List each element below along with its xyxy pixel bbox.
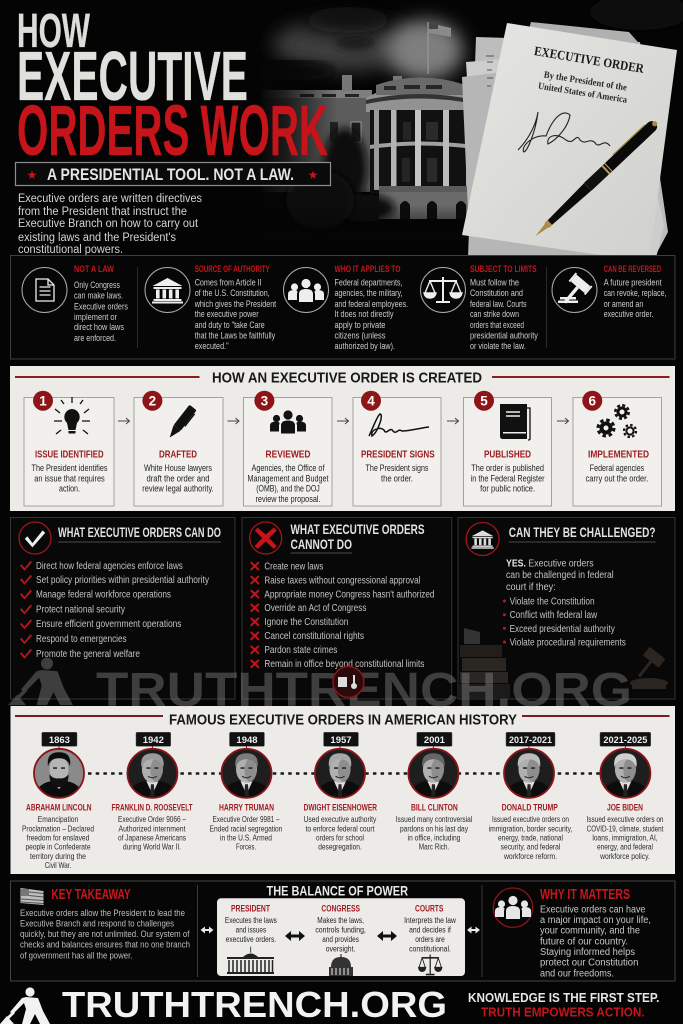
step 2 — [134, 391, 223, 506]
balance of power: THE BALANCE OF POWER — [266, 882, 408, 898]
portrait — [33, 749, 85, 799]
fact: subject to limits: presidential authority — [470, 330, 538, 340]
entry: Trump — [489, 732, 572, 861]
entry: Lincoln: people in Confederate — [26, 843, 91, 852]
subtitle banner: ★ — [308, 168, 318, 182]
step 3: Agencies, the Office of — [252, 463, 325, 473]
list of powers: Manage federal workforce operations — [36, 590, 171, 600]
list of powers: Set policy priorities within presidential authority — [36, 575, 209, 586]
balance of power — [200, 882, 480, 976]
icon: flag — [20, 888, 44, 905]
fact: subject to limits: can strike down — [470, 309, 519, 319]
branch: congress: oversight. — [326, 945, 355, 954]
fact: source of authority: that the Laws be faithfully — [195, 330, 276, 340]
icon: x in circle — [250, 522, 282, 554]
list of limits: Appropriate money Congress hasn't authorized — [264, 590, 434, 600]
entry: Lincoln — [22, 732, 94, 870]
list of grounds: Conflict with federal law — [510, 610, 598, 621]
fact: source of authority: SOURCE OF AUTHORITY — [195, 264, 270, 275]
key takeaway: Executive Branch and respond to challenges — [20, 919, 174, 930]
footer tagline — [468, 991, 659, 1020]
entry: Clinton — [396, 732, 472, 852]
fact: source of authority — [145, 264, 277, 351]
entry: Truman — [210, 732, 282, 852]
why it matters: WHY IT MATTERS — [540, 887, 630, 903]
icon: White House building — [262, 75, 475, 219]
title: EXECUTIVE — [17, 37, 248, 115]
icon: white house — [227, 947, 274, 974]
list of powers: Promote the general welfare — [36, 649, 140, 660]
entry: Lincoln: ABRAHAM LINCOLN — [26, 802, 92, 812]
icon: people — [270, 410, 306, 434]
intro text: constitutional powers. — [18, 244, 123, 256]
branch: courts: Interprets the law — [404, 916, 456, 925]
entry: Trump: 2017-2021 — [509, 735, 553, 746]
step 3: REVIEWED — [266, 448, 311, 460]
arrow — [467, 926, 480, 934]
entry: Trump: Issued executive orders on — [492, 815, 569, 824]
fact: source of authority: of the U.S. Constitution, — [195, 288, 270, 298]
watermark: TRUTHTRENCH.ORG — [96, 664, 632, 717]
list of grounds: Violate the Constitution — [510, 596, 595, 608]
list of grounds: Exceed presidential authority — [510, 624, 615, 635]
answer text: court if they: — [506, 582, 556, 593]
entry: Eisenhower: to enforce federal court — [306, 824, 375, 833]
branch: courts: constitutional. — [409, 945, 451, 954]
arrow — [377, 931, 397, 941]
step 4 — [353, 391, 441, 506]
step 5 — [464, 391, 552, 506]
heading: CANNOT DO — [290, 536, 352, 552]
portrait — [314, 747, 366, 799]
panel: what executive orders can do — [10, 518, 235, 699]
entry: Roosevelt: of Japanese Americans — [118, 834, 186, 843]
portrait — [407, 747, 459, 799]
icon: book — [500, 404, 530, 440]
footer logo: TRUTHTRENCH.ORG — [62, 984, 447, 1024]
list of powers: Direct how federal agencies enforce laws — [36, 561, 183, 572]
entry: Clinton: 2001 — [424, 735, 446, 746]
fact: can be reversed — [552, 264, 666, 319]
step 6 — [573, 391, 662, 506]
branch: congress: CONGRESS — [321, 904, 360, 914]
icon: scales — [418, 955, 442, 975]
icon: stormy sky — [258, 7, 463, 81]
entry: Biden — [586, 732, 664, 861]
entry: Roosevelt: Executive Order 9066 – — [118, 815, 186, 824]
fact: source of authority: which gives the President — [194, 299, 277, 309]
fact: not a law: implement or — [74, 312, 117, 322]
arrow — [200, 926, 214, 934]
list of grounds: Violate procedural requirements — [510, 638, 626, 648]
entry: Biden: COVID-19, climate, student — [587, 824, 664, 833]
step 2: draft the order and — [146, 473, 210, 483]
step 4: 4 — [367, 394, 375, 408]
why it matters: protect our Constitution — [540, 958, 638, 969]
branch: president — [225, 904, 277, 974]
executive order document with pen: United States of America — [537, 82, 628, 106]
entry: Biden: JOE BIDEN — [607, 802, 643, 812]
step 6: 6 — [589, 394, 597, 408]
why it matters — [493, 887, 651, 979]
panel: bottom summary — [10, 881, 675, 981]
entry: Eisenhower: desegregation. — [318, 843, 362, 852]
step 3: 3 — [261, 394, 269, 408]
footer tagline: KNOWLEDGE IS THE FIRST STEP. — [468, 991, 659, 1005]
step 4: The President signs — [366, 463, 429, 473]
portrait — [503, 747, 555, 799]
heading: FAMOUS EXECUTIVE ORDERS IN AMERICAN HISTORY — [169, 712, 517, 728]
step 4: the order. — [381, 473, 413, 483]
intro text: Executive Branch on how to carry out — [18, 218, 199, 230]
panel: famous executive orders — [10, 706, 675, 874]
branch: courts — [404, 904, 456, 975]
fact: can be reversed: executive order. — [604, 309, 653, 319]
fact: source of authority: the executive power — [195, 309, 259, 319]
branch: congress — [315, 904, 366, 976]
entry: Biden: loans, immigration, AI, — [592, 834, 658, 843]
list of powers — [20, 561, 209, 660]
key takeaway — [20, 887, 190, 961]
why it matters: Staying informed helps — [540, 947, 635, 958]
icon: capitol — [329, 954, 353, 976]
entry: Truman: Forces. — [236, 843, 256, 852]
watermark — [8, 658, 632, 717]
entry: Biden: 2021-2025 — [603, 735, 648, 746]
entry: Eisenhower — [304, 732, 377, 852]
step 1: The President identifies — [32, 463, 108, 473]
fade of building into background — [258, 60, 338, 210]
branch: courts: and decides if — [409, 925, 452, 934]
branch: congress: Makes the laws, — [317, 916, 364, 925]
arrow — [228, 418, 239, 424]
intro text: Executive orders are written directives — [18, 193, 202, 205]
step 1: action. — [59, 484, 80, 494]
fact: can be reversed: A future president — [604, 278, 662, 288]
fact: who it applies to: It does not directly — [334, 309, 394, 319]
title: ORDERS WORK — [17, 92, 328, 171]
step 1: ISSUE IDENTIFIED — [35, 448, 104, 460]
entry: Truman: Executive Order 9981 – — [212, 815, 280, 824]
step 2: White House lawyers — [144, 463, 212, 473]
entry: Trump: DONALD TRUMP — [502, 802, 558, 812]
step 1 — [24, 391, 114, 506]
step 6: IMPLEMENTED — [588, 448, 649, 460]
fact: subject to limits: SUBJECT TO LIMITS — [470, 264, 537, 275]
answer text: can be challenged in federal — [506, 570, 614, 581]
portrait — [599, 747, 651, 799]
list of limits: Override an Act of Congress — [264, 603, 366, 614]
icon: light bulb — [54, 397, 90, 434]
icon: fountain pen — [531, 117, 660, 240]
entry: Trump: immigration, border security, — [489, 824, 572, 833]
step 2: review legal authority. — [142, 484, 214, 494]
list of limits — [250, 562, 434, 670]
panel: how an executive order is created — [10, 366, 675, 511]
fact: not a law: Executive orders — [74, 302, 128, 312]
panel: key facts — [10, 256, 675, 359]
fact: who it applies to: agencies, the military, — [334, 288, 402, 298]
step 4: PRESIDENT SIGNS — [361, 448, 435, 460]
entry: Lincoln: freedom for enslaved — [27, 834, 89, 843]
arrow — [285, 931, 305, 941]
entry: Lincoln: territory during the — [30, 852, 86, 861]
branch: congress: and provides — [322, 935, 359, 944]
heading: HOW AN EXECUTIVE ORDER IS CREATED — [212, 370, 482, 386]
list of powers: Respond to emergencies — [36, 634, 127, 645]
entry: Truman: in the U.S. Armed — [220, 834, 272, 843]
list of limits: Pardon state crimes — [264, 645, 337, 656]
icon: books — [458, 628, 510, 698]
entry: Lincoln: 1863 — [49, 735, 70, 746]
entry: Trump: security, and federal — [501, 843, 561, 852]
subtitle banner: ★ — [27, 168, 37, 182]
branch: president: Executes the laws — [225, 916, 277, 925]
icon: signature — [518, 112, 610, 152]
answer text — [506, 558, 614, 593]
why it matters: and our freedoms. — [540, 968, 614, 979]
branch: courts: orders are — [415, 935, 445, 944]
entry: Truman: HARRY TRUMAN — [219, 802, 274, 812]
fact: subject to limits: or violate the law. — [470, 341, 526, 351]
fact: subject to limits: orders that exceed — [470, 320, 524, 330]
step 6: Federal agencies — [590, 463, 645, 473]
portrait — [126, 747, 178, 799]
fact: who it applies to: citizens (unless — [334, 330, 386, 340]
entry: Clinton: Marc Rich. — [419, 843, 449, 852]
entry: Clinton: pardons on his last day — [400, 824, 468, 833]
hero image: White House at dusk — [258, 0, 683, 245]
fact: who it applies to — [284, 264, 408, 351]
entry: Lincoln: Emancipation — [38, 815, 78, 824]
step 2: 2 — [149, 394, 156, 408]
fact: not a law: can make laws. — [74, 290, 123, 300]
arrow — [447, 418, 458, 424]
entry: Lincoln: Civil War. — [45, 861, 71, 870]
fact: not a law — [22, 264, 128, 343]
fact: who it applies to: and federal employees. — [334, 299, 408, 309]
fact: who it applies to: authorized by law). — [334, 341, 395, 351]
entry: Lincoln: Proclamation – Declared — [22, 824, 94, 833]
fact: source of authority: Comes from Article II — [195, 278, 262, 288]
entry: Eisenhower: 1957 — [330, 735, 352, 746]
key takeaway: of government has all the power. — [20, 950, 132, 961]
fact: not a law: NOT A LAW — [74, 264, 114, 275]
fact: not a law: Only Congress — [74, 280, 120, 290]
entry: Clinton: BILL CLINTON — [411, 802, 458, 812]
fact: who it applies to: Federal departments, — [334, 278, 402, 288]
executive order document with pen — [462, 22, 677, 262]
entry: Roosevelt: FRANKLIN D. ROOSEVELT — [112, 802, 193, 812]
entry: Roosevelt: Authorized internment — [118, 824, 186, 833]
icon: check in circle — [19, 522, 51, 554]
entry: Roosevelt: 1942 — [143, 735, 164, 746]
panel: can they be challenged — [458, 518, 675, 699]
entry: Trump: workforce reform. — [503, 852, 557, 861]
step 3: (OMB), and the DOJ — [256, 484, 320, 494]
branch: courts: COURTS — [415, 904, 443, 914]
entry: Roosevelt: during World War II. — [123, 843, 181, 852]
intro text — [18, 193, 202, 256]
key takeaway: quickly, but they are not unlimited. Our system of — [20, 929, 190, 940]
key takeaway: checks and balances ensures that no one branch — [20, 940, 190, 951]
executive order document with pen: EXECUTIVE ORDER — [533, 43, 646, 76]
subtitle banner: A PRESIDENTIAL TOOL. NOT A LAW. — [47, 165, 294, 184]
key takeaway: KEY TAKEAWAY — [51, 887, 131, 903]
why it matters: a major impact on your life, — [540, 915, 651, 926]
icon: people in circle — [493, 888, 533, 927]
fact: subject to limits: Must follow the — [470, 278, 519, 288]
title: HOW — [17, 5, 90, 58]
portrait — [220, 747, 272, 799]
step 5: for public notice. — [480, 484, 535, 494]
icon: dark trees — [286, 0, 683, 230]
panel: what executive orders cannot do — [242, 518, 452, 699]
intro text: existing laws and the President's — [18, 232, 176, 244]
entry: Roosevelt — [112, 732, 193, 852]
step 3: Management and Budget — [248, 473, 329, 483]
fact: subject to limits — [420, 264, 538, 351]
heading: WHAT EXECUTIVE ORDERS CAN DO — [58, 524, 221, 540]
entry: Truman: 1948 — [236, 735, 258, 746]
entry: Eisenhower: DWIGHT EISENHOWER — [304, 802, 377, 812]
step 3 — [244, 391, 332, 506]
entry: Clinton: in office, including — [408, 834, 460, 843]
fact: who it applies to: apply to private — [334, 320, 386, 330]
step 5: PUBLISHED — [484, 448, 531, 460]
fact: not a law: are enforced. — [74, 333, 116, 343]
footer tagline: TRUTH EMPOWERS ACTION. — [481, 1006, 645, 1020]
icon: back sheets — [462, 22, 668, 262]
icon: main sheet — [462, 23, 677, 262]
icon: gears — [598, 405, 636, 437]
list of limits: Cancel constitutional rights — [264, 631, 364, 642]
entry: Biden: energy, and federal — [597, 843, 653, 852]
step 5: in the Federal Register — [471, 473, 545, 483]
title — [17, 5, 328, 171]
branch: president: executive orders. — [226, 935, 276, 944]
step 3: review the proposal. — [256, 494, 320, 504]
entry: Eisenhower: Used executive authority — [304, 815, 376, 824]
icon: pen — [166, 405, 198, 441]
list of limits: Raise taxes without congressional approval — [264, 576, 420, 586]
step 1: 1 — [39, 394, 47, 408]
entry: Biden: Issued executive orders on — [586, 815, 664, 824]
heading: WHAT EXECUTIVE ORDERS — [290, 521, 424, 537]
list of grounds — [503, 596, 626, 648]
entry: Clinton: Issued many controversial — [396, 815, 472, 824]
arrow — [337, 418, 348, 424]
step 1: an issue that requires — [34, 473, 105, 483]
fact: can be reversed: can revoke, replace, — [604, 288, 666, 298]
fact: not a law: direct how laws — [74, 322, 124, 332]
why it matters: your community, and the — [540, 926, 640, 937]
entry: Eisenhower: orders for school — [316, 834, 364, 843]
entry: Trump: energy, trade, national — [498, 834, 563, 843]
fact: source of authority: executed." — [195, 341, 229, 351]
heading — [290, 521, 424, 554]
arrow — [118, 418, 130, 424]
branch: president: and issues — [236, 925, 266, 934]
list of limits: Create new laws — [264, 562, 323, 572]
branch: president: PRESIDENT — [231, 904, 270, 914]
why it matters: Executive orders can have — [540, 904, 646, 915]
entry: Biden: workforce policy. — [599, 852, 650, 861]
icon: courthouse in circle — [466, 522, 499, 556]
icon: gavel on block — [630, 647, 668, 689]
icon: signature — [369, 414, 429, 436]
fact: subject to limits: Constitution and — [470, 288, 523, 298]
fact: can be reversed: or amend an — [604, 299, 643, 309]
step 2: DRAFTED — [159, 448, 197, 460]
icon: flag and pole — [428, 22, 451, 74]
executive order document with pen: By the President of the — [543, 71, 628, 94]
fact: who it applies to: WHO IT APPLIES TO — [334, 264, 400, 275]
step 5: 5 — [480, 394, 488, 408]
key takeaway: Executive orders allow the President to lead the — [20, 908, 185, 919]
list of powers: Protect national security — [36, 604, 125, 616]
fact: source of authority: and duty to "take Care — [195, 320, 265, 330]
timeline dots — [88, 772, 600, 775]
fact: subject to limits: federal law. Courts — [470, 299, 527, 309]
list of powers: Ensure efficient government operations — [36, 619, 182, 630]
icon: digger silhouette — [0, 987, 50, 1024]
answer text: YES. Executive orders — [506, 558, 594, 570]
intro text: from the President that instruct the — [18, 206, 187, 218]
arrow — [557, 418, 568, 424]
why it matters: future of our country. — [540, 936, 628, 947]
step 5: The order is published — [471, 463, 544, 473]
list of limits: Remain in office beyond constitutional limits — [264, 659, 424, 670]
branch: congress: controls funding, — [315, 925, 366, 934]
list of limits: Ignore the Constitution — [264, 617, 348, 628]
icon: small emblem over watermark — [333, 666, 364, 698]
step 6: carry out the order. — [586, 473, 648, 483]
entry: Truman: Ended racial segregation — [210, 824, 282, 833]
